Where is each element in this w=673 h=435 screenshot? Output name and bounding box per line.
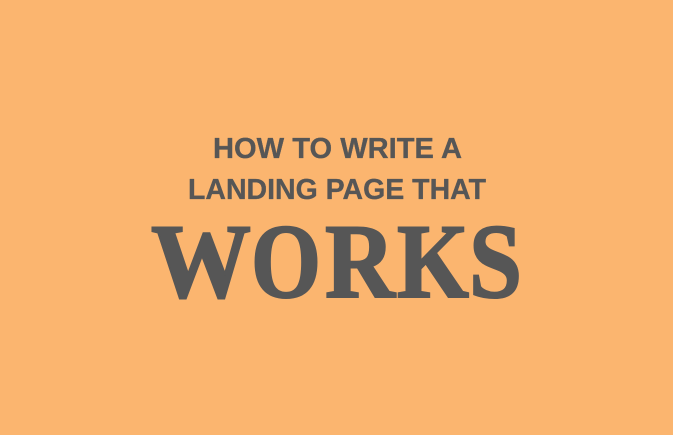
heading line 2: LANDING PAGE THAT [188, 174, 486, 206]
heading: WORKS: K [397, 203, 469, 320]
heading: WORKS: W [151, 203, 251, 320]
heading line 1: HOW TO WRITE A [213, 133, 462, 165]
heading: WORKS: R [325, 203, 396, 320]
heading: WORKS: O [251, 203, 321, 320]
heading: WORKS: S [469, 203, 522, 320]
